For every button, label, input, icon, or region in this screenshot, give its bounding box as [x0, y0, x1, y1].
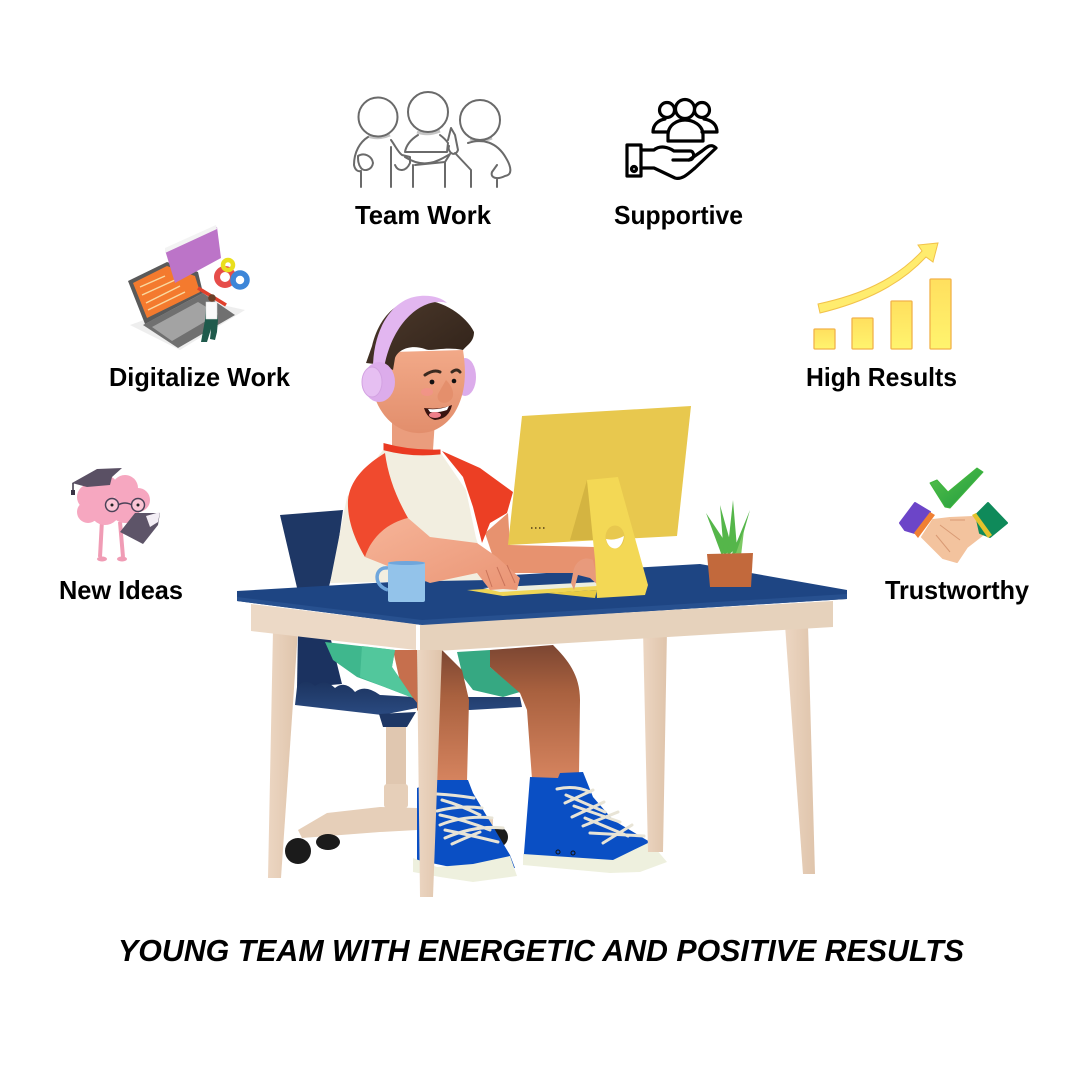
- face details: [424, 370, 460, 420]
- shoe right: [523, 772, 667, 873]
- shorts light band: [360, 646, 413, 698]
- icon: digitalize work: [128, 225, 247, 350]
- fingers: [486, 565, 515, 587]
- bars: [814, 279, 951, 349]
- left leg: [268, 630, 298, 878]
- monitor dots: [531, 527, 544, 529]
- chair seat: [295, 682, 522, 715]
- upper body: [330, 296, 598, 602]
- check mark: [930, 468, 983, 508]
- shorts left: [325, 642, 413, 698]
- chair pole: [386, 725, 406, 787]
- brain: [77, 475, 150, 525]
- right front leg: [785, 625, 815, 874]
- desk edge highlight: [237, 594, 847, 625]
- chair back: [280, 510, 343, 592]
- green cuff: [976, 503, 1007, 537]
- stand: [587, 477, 648, 598]
- label: trustworthy: Trustworthy: [885, 575, 1030, 605]
- purple cuff: [900, 503, 930, 533]
- front leg: [417, 650, 442, 897]
- laptop screen: [128, 262, 203, 324]
- icon: supportive: [627, 100, 717, 178]
- label: new ideas: New Ideas: [59, 575, 183, 605]
- plant: [706, 500, 753, 587]
- book: [120, 513, 160, 544]
- label: high results: High Results: [806, 362, 957, 392]
- bottom title: YOUNG TEAM WITH ENERGETIC AND POSITIVE RESULTS: [118, 933, 964, 968]
- right hand: [571, 559, 598, 590]
- pot: [707, 553, 753, 587]
- feet: [97, 556, 107, 562]
- laptop base: [143, 293, 235, 348]
- icon: new ideas: [71, 468, 160, 562]
- chair wheels: [285, 827, 508, 864]
- red sleeve left: [348, 453, 408, 557]
- leaves: [706, 500, 750, 556]
- stand foot: [547, 590, 597, 598]
- right earcup: [454, 358, 476, 396]
- legs: [100, 520, 123, 557]
- window: [165, 227, 221, 283]
- label: team work: Team Work: [355, 200, 492, 230]
- code lines: [140, 276, 185, 310]
- pencil: [198, 288, 226, 305]
- blush: [421, 388, 433, 396]
- collar: [385, 445, 439, 454]
- icon: trustworthy: [900, 468, 1007, 562]
- chair base: [298, 807, 493, 838]
- arrow: [818, 243, 938, 313]
- label: supportive: Supportive: [614, 200, 743, 230]
- glasses: [106, 498, 144, 512]
- keyboard: [152, 302, 218, 341]
- chair collar: [384, 784, 408, 808]
- neck: [392, 420, 435, 450]
- figures: [354, 92, 510, 187]
- lower body: [325, 642, 667, 882]
- stand hole: [606, 526, 624, 548]
- red sleeve right: [442, 451, 513, 543]
- apron left: [251, 604, 416, 650]
- label: digitalize work: Digitalize Work: [109, 362, 291, 392]
- gears: [217, 269, 233, 285]
- icon: team work: [354, 92, 510, 187]
- desk: [237, 564, 847, 897]
- headphones: [362, 296, 447, 402]
- mug: [377, 561, 425, 602]
- icon: high results: [814, 243, 951, 349]
- leg left: [417, 650, 469, 782]
- back right leg: [643, 630, 667, 852]
- apron right: [420, 601, 833, 652]
- chair: [280, 510, 522, 864]
- leg right: [490, 645, 580, 780]
- left thigh shade: [393, 650, 418, 704]
- cap: [72, 468, 122, 487]
- computer: [508, 406, 691, 598]
- keyboard: [467, 582, 597, 596]
- stand shadow: [570, 480, 594, 540]
- shoe left: [413, 780, 517, 882]
- hands: [922, 517, 985, 562]
- shorts right: [457, 650, 520, 697]
- monitor: [508, 406, 691, 545]
- head: [375, 350, 465, 433]
- right arm: [485, 513, 597, 577]
- left arm: [365, 518, 520, 590]
- chair seat block: [379, 712, 416, 727]
- person: [201, 306, 218, 342]
- chair lower back: [297, 632, 342, 688]
- shadow: [130, 300, 245, 350]
- desk top: [237, 564, 847, 625]
- hair: [366, 300, 474, 370]
- chin shadows: [368, 131, 492, 141]
- torso: [330, 450, 490, 583]
